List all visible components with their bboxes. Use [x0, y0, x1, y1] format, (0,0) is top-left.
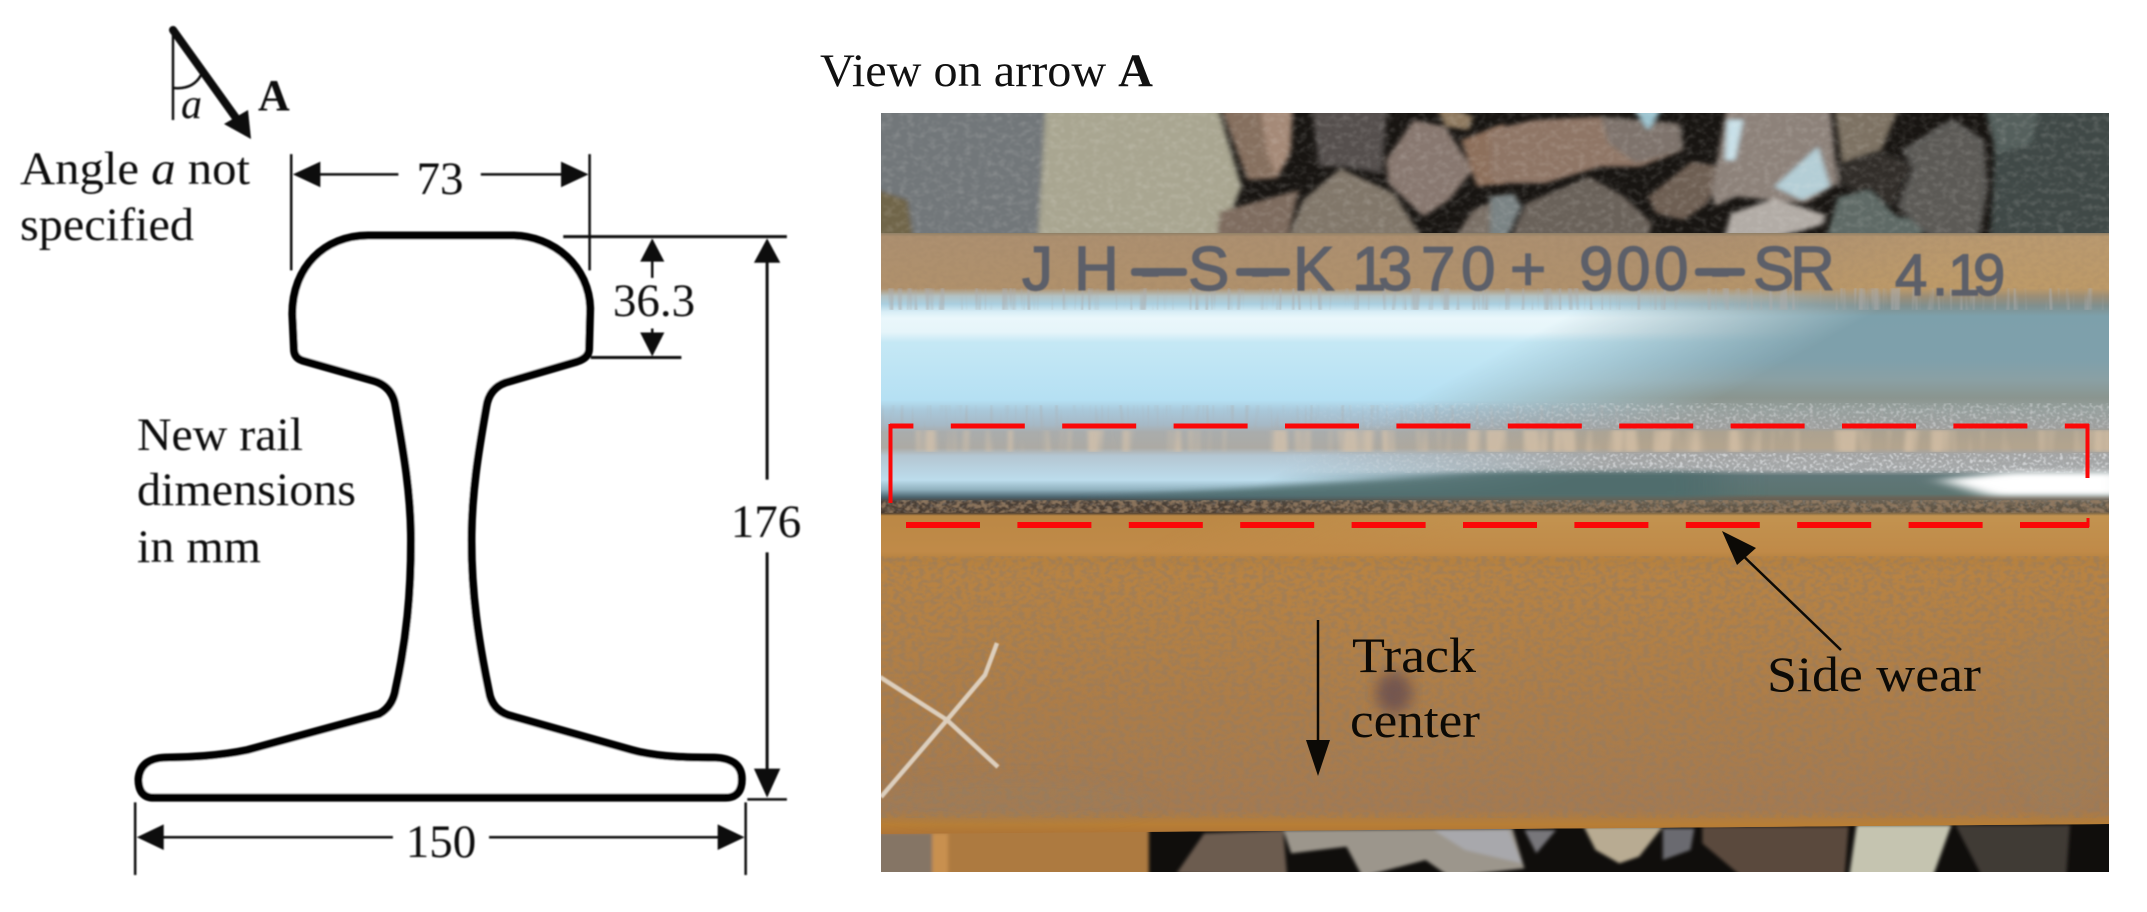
icon: view arrow A with angle a	[173, 30, 290, 139]
dimension: head depth 36.3	[563, 237, 787, 358]
text: new rail dimensions: in mm	[137, 521, 261, 573]
dimension: rail height 176: 176	[731, 496, 801, 548]
panel: rail photograph	[860, 100, 2138, 880]
text: angle note: Angle a not	[20, 143, 250, 195]
dimension: base width 150	[135, 802, 746, 875]
panel: rail cross-section diagram	[20, 30, 801, 875]
lower ballast stones	[881, 824, 2109, 872]
label: side wear: Side wear	[1767, 646, 1981, 702]
dimension: rail height 176	[731, 238, 801, 799]
text: new rail dimensions	[137, 409, 356, 573]
dimension: head width 73: 73	[416, 153, 464, 205]
label: track center: center	[1350, 692, 1480, 748]
label: track center: Track	[1352, 627, 1476, 683]
dimension: base width 150: 150	[406, 816, 476, 868]
rail web surface	[860, 233, 2130, 843]
heading: view on arrow A: View on arrow A	[820, 45, 1153, 97]
handwritten rail marking: JH-S-K1370+900-SR	[1022, 235, 1835, 304]
icon: view arrow A with angle a: A	[258, 71, 290, 120]
handwritten rail marking: 4.19	[1895, 243, 2005, 308]
upper ballast stones	[881, 113, 2109, 233]
dimension: head depth 36.3: 36.3	[613, 275, 695, 327]
icon: view arrow A with angle a: a	[181, 82, 202, 128]
dark spot on rail	[1376, 672, 1412, 714]
dimension: head width 73	[291, 153, 590, 270]
text: angle note: specified	[20, 199, 194, 251]
text: new rail dimensions: dimensions	[137, 464, 356, 516]
text: new rail dimensions: New rail	[137, 409, 303, 461]
callout: side wear dashed region	[890, 424, 2089, 527]
rail profile outline	[138, 235, 742, 798]
chalk cross mark	[880, 643, 998, 797]
handwritten rail marking	[1022, 245, 2004, 297]
arrow: track center direction	[1306, 620, 1330, 776]
label: track center	[1350, 627, 1480, 748]
text: angle note	[20, 143, 250, 251]
arrow: side wear pointer	[1722, 531, 1841, 650]
